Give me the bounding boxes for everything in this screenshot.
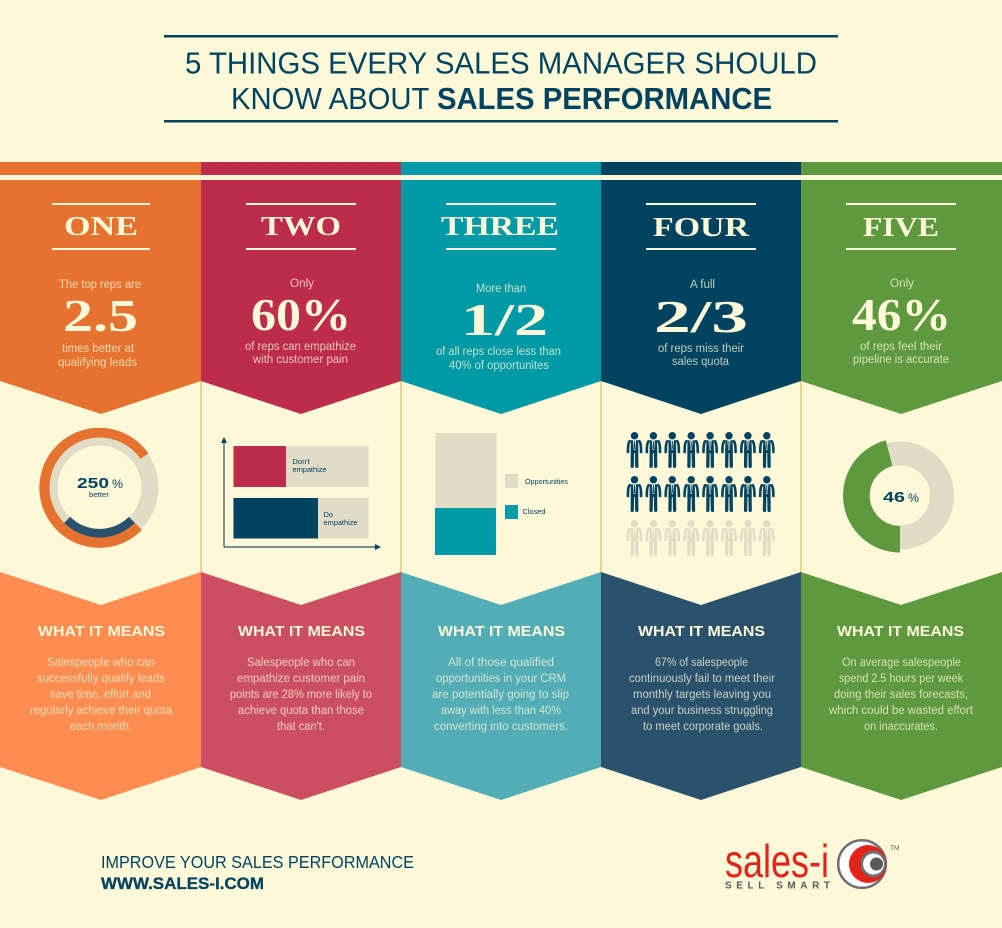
stat: three (436, 283, 561, 372)
stat: five: pipeline is accurate (853, 354, 949, 366)
body text: and your business struggling (631, 705, 773, 717)
chart: opportunities vs closed (435, 433, 568, 555)
title: 5 THINGS EVERY SALES MANAGER SHOULD (185, 46, 817, 80)
panel: what it means five (801, 572, 1002, 800)
footer call to action: IMPROVE YOUR SALES PERFORMANCE (101, 852, 414, 872)
label: don't empathize: Don't (292, 457, 311, 466)
stat: five: Only (890, 278, 914, 290)
stat: three: of all reps close less than (436, 346, 561, 358)
heading: two: TWO (261, 211, 341, 241)
body text: spend 2.5 hours per week (839, 673, 963, 685)
body text: points are 28% more likely to (230, 689, 372, 701)
legend: Closed (522, 507, 546, 516)
footer call to action: WWW.SALES-I.COM (101, 874, 264, 893)
stat: four (654, 279, 748, 368)
panel: what it means two (201, 572, 401, 800)
label: 46% (883, 489, 919, 506)
heading: one: ONE (64, 211, 138, 241)
column dividers (201, 378, 801, 574)
heading: WHAT IT MEANS (38, 623, 165, 640)
body text: On average salespeople (842, 657, 961, 669)
logo: sales-i: TM (890, 845, 899, 852)
body text: that can't. (277, 721, 325, 733)
heading: WHAT IT MEANS (837, 623, 964, 640)
panel: what it means one (0, 572, 201, 800)
stat: two: of reps can empathize (245, 341, 356, 353)
body text: each month. (70, 721, 132, 733)
chart: 46% donut (843, 440, 942, 552)
panel: three (401, 162, 601, 414)
stat: four: 2/3 (654, 292, 748, 342)
label: 250% better (77, 475, 123, 499)
body text: All of those qualified (448, 657, 554, 669)
legend (505, 474, 568, 519)
chart: empathize bars (221, 437, 381, 550)
heading: four: FOUR (653, 212, 750, 242)
body text: are potentially going to slip (432, 689, 569, 701)
panel: five (801, 162, 1002, 414)
stat: one: times better at (62, 343, 135, 355)
label: 250% better: 250 (77, 475, 109, 492)
stat: five (852, 278, 951, 366)
stat: two (245, 278, 356, 366)
stat: one: The top reps are (59, 279, 141, 291)
logo: sales-i: sales-i (725, 835, 829, 887)
body text (629, 657, 775, 733)
stat: four: of reps miss their (658, 343, 744, 355)
body text: doing their sales forecasts, (834, 689, 968, 701)
footer call to action (101, 852, 414, 893)
stat: two: Only (290, 278, 314, 290)
label: 250% better: % (112, 477, 123, 491)
title (164, 35, 838, 122)
body text: achieve quota than those (238, 705, 364, 717)
label: do empathize (324, 510, 358, 527)
label: 250% better: better (89, 490, 110, 499)
body text: save time, effort and (50, 689, 151, 701)
stat: four: A full (690, 279, 715, 291)
body text: Salespeople who can (47, 657, 155, 669)
panel: two (201, 162, 401, 414)
label: 46%: 46 (883, 489, 905, 506)
label: do empathize: Do (324, 510, 333, 519)
body text: opportunities in your CRM (436, 673, 566, 685)
body text: on inaccurates. (864, 721, 938, 733)
body text (432, 657, 569, 733)
label: 46%: % (908, 491, 919, 505)
panel: four (601, 162, 801, 414)
body text: away with less than 40% (441, 705, 561, 717)
pictogram: reps missing quota (628, 432, 773, 554)
heading: WHAT IT MEANS (638, 623, 765, 640)
stat: three: More than (476, 283, 526, 295)
stat: four: sales quota (672, 356, 730, 368)
body text: Salespeople who can (247, 657, 355, 669)
stat: three: 40% of opportunites (449, 360, 549, 372)
panel: what it means four (601, 572, 801, 800)
label: don't empathize: empathize (292, 465, 326, 474)
heading: WHAT IT MEANS (238, 623, 365, 640)
panel: what it means three (401, 572, 601, 800)
body text (230, 657, 372, 733)
chart: 250% ring (39, 428, 150, 548)
stat: five: of reps feel their (860, 341, 942, 353)
legend: Opportunities (525, 477, 568, 486)
body text (30, 657, 173, 733)
label: do empathize: empathize (324, 518, 358, 527)
stat: one (58, 279, 141, 369)
stat: one: qualifying leads (58, 357, 137, 369)
body text: regularly achieve their quota (30, 705, 173, 717)
heading: five: FIVE (863, 212, 939, 242)
panel: one (0, 162, 201, 414)
body text: empathize customer pain (237, 673, 365, 685)
body text: to meet corporate goals. (643, 721, 763, 733)
body text: monthly targets leaving you (633, 689, 771, 701)
stat: two: with customer pain (252, 354, 348, 366)
body text: 67% of salespeople (655, 657, 748, 669)
white strip across headers (0, 175, 1002, 180)
title: KNOW ABOUT SALES PERFORMANCE (231, 82, 772, 116)
stat: three: 1/2 (461, 295, 548, 345)
logo: sales-i: SELL SMART (725, 880, 830, 892)
body text: successfully qualify leads (37, 673, 165, 685)
body text: which could be wasted effort (828, 705, 974, 717)
heading: WHAT IT MEANS (438, 623, 565, 640)
body text: converting into customers. (434, 721, 568, 733)
stat: five: 46% (852, 290, 951, 340)
body text (828, 657, 974, 733)
stat: two: 60% (251, 290, 351, 340)
body text: continuously fail to meet their (629, 673, 775, 685)
stat: one: 2.5 (63, 291, 138, 341)
heading: three: THREE (441, 211, 559, 241)
label: don't empathize (292, 457, 326, 474)
